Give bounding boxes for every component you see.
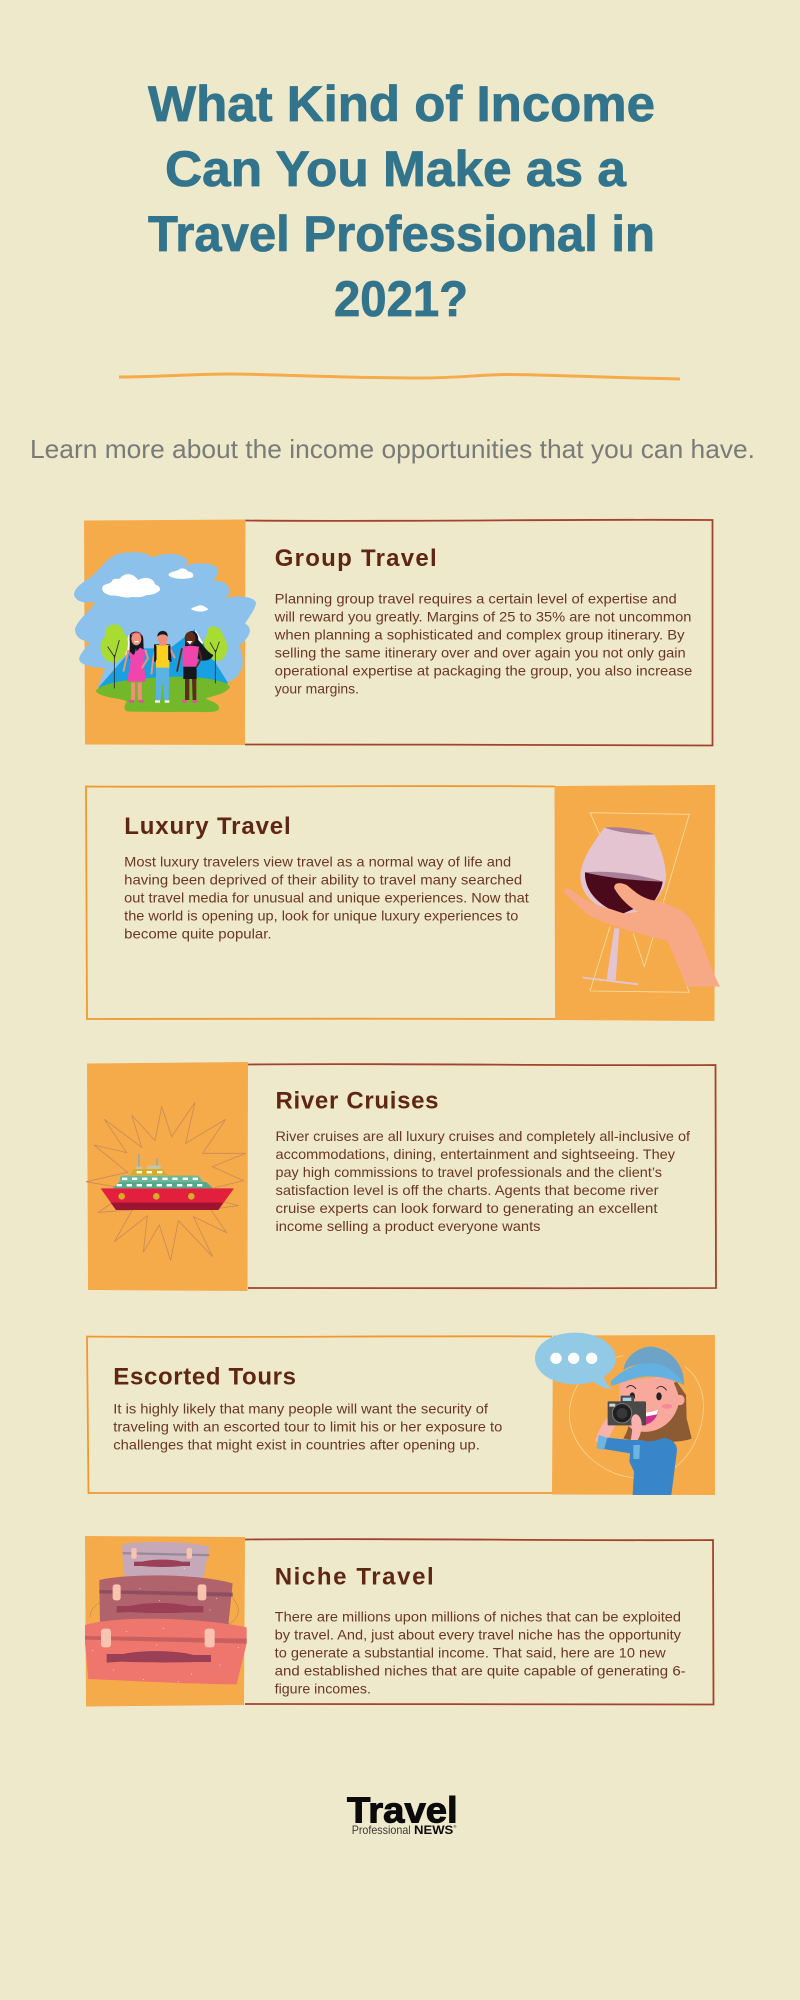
text: river cruises: cruise experts can look forward to generating an excellent xyxy=(276,1200,658,1216)
illustration: wine glass in hand xyxy=(563,813,720,992)
text: group travel: operational expertise at packaging the group, you also increase xyxy=(275,662,693,678)
orange image block: niche travel xyxy=(85,1536,245,1706)
text: group travel: selling the same itinerary over and over again you not only gain xyxy=(275,644,686,660)
text: river cruises: pay high commissions to travel professionals and the client’s xyxy=(276,1164,662,1180)
camera xyxy=(595,1396,646,1442)
panel: niche travel xyxy=(85,1536,713,1706)
panel: luxury travel xyxy=(86,785,720,1021)
title: Travel Professional in xyxy=(148,206,655,262)
logo: Travel Professional NEWS: NEWS xyxy=(414,1823,453,1837)
text: niche travel: figure incomes. xyxy=(275,1681,371,1697)
orange image block: river cruises xyxy=(87,1062,248,1291)
text: luxury travel xyxy=(124,854,529,942)
text: river cruises: River cruises are all luxury cruises and completely all-inclusive of xyxy=(276,1128,690,1144)
speech bubble xyxy=(535,1333,616,1389)
logo: Travel Professional NEWS: ® xyxy=(454,1824,456,1829)
text: niche travel: by travel. And, just about every travel niche has the opportunity xyxy=(275,1627,681,1643)
heading: escorted tours: Escorted Tours xyxy=(113,1363,296,1390)
text: luxury travel: out travel media for unusual and unique experiences. Now that xyxy=(124,890,529,906)
text: niche travel xyxy=(275,1609,686,1697)
trees xyxy=(100,624,227,688)
heading: river cruises: River Cruises xyxy=(276,1087,438,1114)
text: niche travel: to generate a substantial income. That said, here are 10 new xyxy=(275,1645,667,1661)
text: river cruises: satisfaction level is off the charts. Agents that become river xyxy=(276,1182,659,1198)
person: woman in pink top xyxy=(177,631,213,703)
blue shirt xyxy=(597,1435,677,1495)
text: escorted tours xyxy=(113,1400,503,1452)
text: river cruises: accommodations, dining, entertainment and sightseeing. They xyxy=(276,1146,675,1162)
text: niche travel: There are millions upon millions of niches that can be exploited xyxy=(275,1609,681,1625)
text: river cruises xyxy=(276,1128,690,1234)
text: niche travel: and established niches that are quite capable of generating 6- xyxy=(275,1663,686,1679)
panel: group travel xyxy=(74,520,712,746)
logo: Travel Professional NEWS: Professional xyxy=(352,1823,411,1837)
person: boy with backpack xyxy=(151,631,175,703)
orange image block: escorted tours xyxy=(552,1335,715,1495)
heading: luxury travel: Luxury Travel xyxy=(124,813,291,840)
title: Can You Make as a xyxy=(165,141,627,197)
panel: escorted tours xyxy=(87,1333,715,1495)
orange image block: group travel xyxy=(84,520,246,745)
title: 2021? xyxy=(334,271,468,327)
subtitle: Learn more about the income opportunities that you can have. xyxy=(30,434,755,464)
person: girl in pink dress xyxy=(123,632,148,703)
text: luxury travel: Most luxury travelers view travel as a normal way of life and xyxy=(124,854,511,870)
illustration: woman with camera xyxy=(535,1333,703,1495)
text: escorted tours: traveling with an escorted tour to limit his or her exposure to xyxy=(113,1418,503,1434)
text: river cruises: income selling a product everyone wants xyxy=(276,1218,540,1234)
title xyxy=(148,76,655,327)
text: escorted tours: It is highly likely that many people will want the security of xyxy=(113,1400,488,1416)
text: escorted tours: challenges that might exist in countries after opening up. xyxy=(113,1436,480,1452)
text: group travel xyxy=(274,590,693,696)
text: group travel: your margins. xyxy=(275,680,359,696)
text: group travel: will reward you greatly. Margins of 25 to 35% are not uncommon xyxy=(274,608,691,624)
title: What Kind of Income xyxy=(148,76,655,132)
illustration: stacked suitcases xyxy=(85,1542,247,1684)
text: luxury travel: become quite popular. xyxy=(124,926,272,942)
logo: Travel Professional NEWS: Travel xyxy=(347,1790,458,1831)
orange image block: luxury travel xyxy=(554,785,715,1021)
text: group travel: when planning a sophisticated and complex group itinerary. By xyxy=(274,626,684,642)
illustration: cruise ship with starburst xyxy=(86,1102,246,1261)
panel: river cruises xyxy=(86,1062,716,1291)
heading: group travel: Group Travel xyxy=(275,545,437,572)
heading: niche travel: Niche Travel xyxy=(275,1563,434,1590)
text: luxury travel: having been deprived of their ability to travel many searched xyxy=(124,872,522,888)
text: luxury travel: the world is opening up, look for unique luxury experiences to xyxy=(124,908,519,924)
illustration: group of travelers xyxy=(74,552,256,712)
text: group travel: Planning group travel requires a certain level of expertise and xyxy=(275,590,677,606)
